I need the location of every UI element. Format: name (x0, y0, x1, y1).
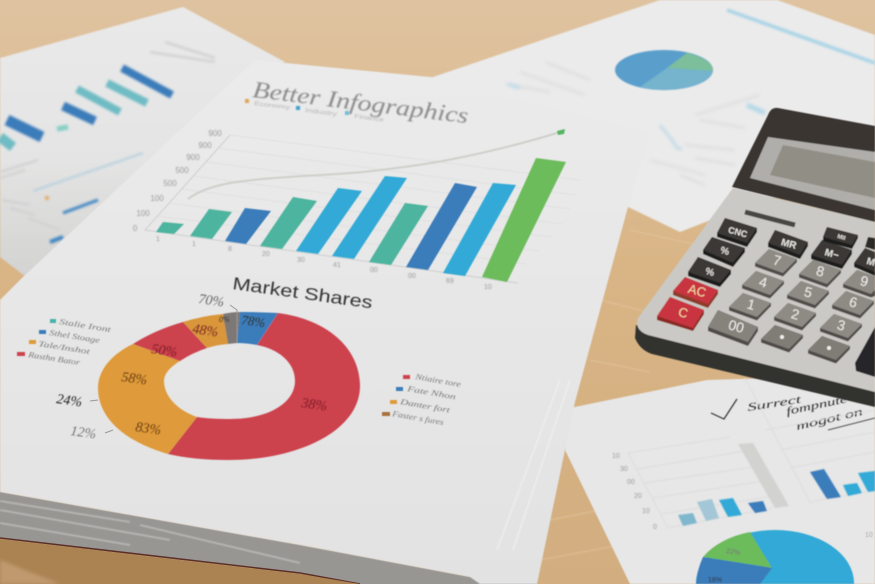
y axis labels: 900 (186, 153, 200, 162)
donut percentage labels: 24% (55, 392, 83, 411)
key: CNC: CNC (727, 225, 749, 240)
key: 6 (832, 291, 874, 318)
x axis labels: 00 (370, 267, 378, 274)
y axis labels: 0 (133, 224, 138, 233)
key: top right (865, 237, 875, 250)
key: M+ small (823, 227, 858, 249)
grey number keys (708, 249, 875, 364)
donut chart (98, 312, 360, 460)
key: M+ small: MII (836, 234, 846, 242)
small pie chart (696, 530, 854, 584)
x axis labels: 00 (408, 273, 416, 280)
key: large dark right (855, 327, 875, 377)
segment: blue (237, 312, 278, 345)
key: 5: 5 (802, 283, 814, 301)
handwritten note: Surrect (747, 393, 803, 414)
key: 4 (742, 271, 784, 298)
small bar chart: 0 (653, 524, 657, 531)
key: 9: 9 (858, 272, 870, 290)
handwritten note: mogot on (795, 406, 865, 433)
small pie chart: 22% (726, 548, 741, 557)
x axis labels (156, 236, 492, 291)
donut percentage labels: 0% (219, 315, 230, 324)
sheet: top left bar report (0, 7, 285, 280)
key: 1: 1 (745, 296, 757, 313)
main report page (0, 60, 650, 584)
dark function keys (688, 218, 875, 377)
solar slot (745, 212, 795, 225)
segment: small orange (183, 314, 228, 348)
key: 00: 00 (727, 316, 746, 336)
key: CNC (717, 218, 757, 247)
key: 2 (774, 303, 816, 330)
donut percentage labels: 58% (120, 370, 148, 389)
sheet: top right pie report (430, 0, 875, 232)
donut percentage labels: 38% (299, 396, 328, 415)
y axis labels: 900 (208, 129, 222, 138)
legend right: Faster s fures (390, 409, 444, 427)
key: 2: 2 (789, 305, 801, 323)
key: 9 (843, 270, 875, 298)
y axis labels: 500 (175, 166, 189, 175)
y axis labels: 100 (150, 194, 164, 203)
handwritten note: fompnute (785, 393, 848, 418)
y axis labels: 500 (163, 179, 177, 188)
key: M minus (811, 240, 852, 269)
small bar chart: 10 (642, 508, 650, 515)
x axis labels: 8 (228, 246, 232, 253)
x axis labels: 69 (446, 278, 454, 285)
key: 5 (787, 281, 829, 308)
donut percentage labels: 50% (150, 342, 178, 361)
donut percentage labels: 48% (191, 322, 219, 341)
donut percentage labels: 70% (197, 292, 225, 311)
x axis labels: 1 (192, 241, 196, 248)
x axis labels: 1 (156, 236, 160, 243)
key: M minus: M− (823, 247, 840, 262)
blurred line chart (0, 42, 215, 242)
calculator base shadow (635, 325, 875, 407)
legend left: Sthel Stoage (49, 328, 101, 345)
y axis labels: 900 (198, 141, 212, 150)
paper stack side (0, 492, 537, 584)
key: 00 (708, 310, 758, 346)
chart legend: Economy (254, 101, 290, 111)
x axis labels: 20 (262, 251, 270, 258)
key: percent: % (719, 245, 730, 258)
small bar chart (612, 378, 875, 531)
key: MR: MR (780, 237, 798, 252)
small bar chart: 30 (620, 466, 628, 473)
key: decimal point (761, 325, 803, 352)
legend left: Tale/Inshot (38, 339, 92, 356)
display bezel (750, 137, 875, 210)
heading: Better Infographics: Better Infographics (251, 77, 470, 128)
x axis labels: 41 (333, 262, 341, 269)
key: M right (854, 248, 875, 276)
donut percentage labels: 12% (69, 424, 97, 443)
key: percent minus: % (704, 266, 715, 279)
calculator (635, 108, 875, 407)
legend right: Ntiaire tore (413, 372, 462, 389)
key: percent minus (688, 257, 731, 287)
blurred pie chart (615, 50, 713, 90)
legend right: Danter fort (398, 397, 451, 415)
chart legend: Industry (305, 108, 337, 118)
blurred long bar (727, 10, 875, 63)
key: 1 (729, 293, 771, 320)
key: 3 (820, 314, 862, 342)
blurred bar chart (0, 68, 172, 147)
legend right (382, 372, 462, 427)
legend left (17, 317, 113, 367)
segment: grey (223, 312, 240, 344)
calculator body (637, 188, 875, 392)
legend left: Stalie Iront (59, 317, 113, 334)
y axis labels (133, 129, 222, 233)
x axis labels: 30 (297, 257, 305, 264)
handwritten note (711, 393, 875, 433)
key: 7: 7 (771, 252, 783, 269)
y axis labels: 100 (136, 209, 150, 218)
blurred report text (505, 62, 765, 185)
sheet: bottom right report (560, 375, 875, 584)
small bar chart: 00 (627, 479, 635, 486)
donut percentage labels: 83% (134, 420, 162, 439)
key: percent (703, 237, 745, 267)
small pie chart: 18% (708, 577, 722, 584)
legend right: Fate Nhon (405, 384, 456, 401)
key: 8: 8 (814, 262, 826, 280)
key: C: C (677, 304, 690, 321)
chart legend (245, 99, 385, 124)
heading: Market Shares: Market Shares (231, 273, 374, 313)
bars (156, 158, 566, 282)
key: MR (768, 230, 808, 259)
LCD screen (770, 145, 875, 198)
key: 8 (799, 260, 841, 288)
key: second point (808, 336, 850, 364)
segment: large orange (98, 344, 197, 454)
key: 6: 6 (847, 293, 859, 311)
x axis labels: 10 (484, 284, 492, 291)
donut percentage labels (55, 292, 328, 443)
key: 7 (755, 249, 797, 276)
segment: small red (133, 322, 207, 361)
segment: large red (168, 313, 360, 460)
display housing (732, 108, 875, 222)
trend line (188, 129, 565, 199)
legend left: Rasthn Bator (26, 350, 82, 367)
small bar chart: 10 (612, 453, 620, 460)
key: AC: AC (687, 281, 708, 300)
cut-off label: 10 (865, 532, 873, 539)
donut percentage labels: 78% (241, 312, 266, 330)
small bar chart: 20 (634, 493, 642, 500)
key: 3: 3 (835, 316, 847, 334)
bar and line chart (133, 129, 580, 291)
red keys (657, 277, 718, 331)
chart legend: Finance (354, 114, 385, 124)
leader lines (90, 305, 237, 433)
key: 4: 4 (757, 273, 769, 291)
